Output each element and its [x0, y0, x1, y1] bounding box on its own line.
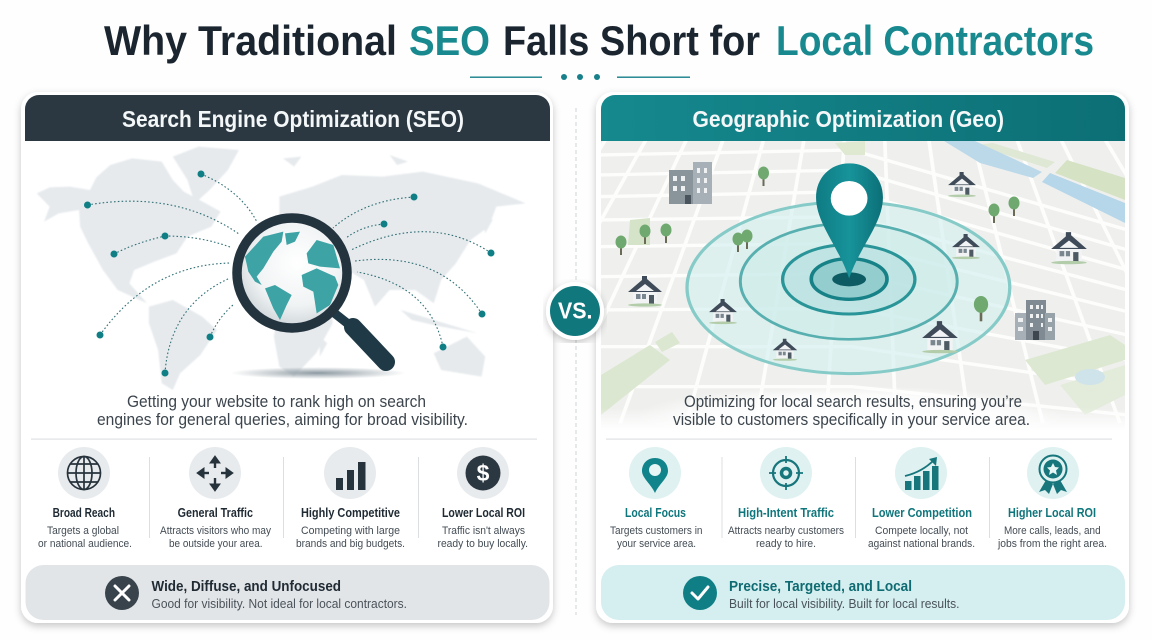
title: Why Traditional — [104, 17, 397, 64]
feature: Highly Competitive: brands and big budgets. — [296, 538, 405, 550]
feature: Local Focus: Local Focus — [625, 506, 686, 520]
trees — [616, 166, 1020, 321]
feature: High-Intent Traffic: High-Intent Traffic — [738, 506, 834, 520]
panel: Geo — [592, 91, 1133, 630]
Geo verdict band — [601, 565, 1125, 620]
title — [104, 17, 1094, 64]
city map illustration — [601, 141, 1125, 420]
SEO header: Search Engine Optimization (SEO) — [122, 106, 464, 132]
title: SEO — [409, 17, 490, 64]
feature: High-Intent Traffic — [728, 447, 844, 550]
icon: check — [683, 576, 717, 610]
feature: Lower Local ROI: Traffic isn't always — [442, 525, 525, 537]
feature: General Traffic: Attracts visitors who may — [160, 525, 271, 537]
feature: Broad Reach: Broad Reach — [53, 506, 115, 520]
title: Falls Short for — [503, 17, 760, 64]
connection lines — [88, 174, 491, 373]
icon: target — [769, 456, 803, 490]
feature: General Traffic: General Traffic — [178, 506, 253, 520]
icon: cross — [105, 576, 139, 610]
feature: Local Focus — [610, 447, 702, 550]
feature: Higher Local ROI — [997, 447, 1107, 550]
map patches — [601, 141, 1125, 415]
panel: SEO — [21, 92, 553, 623]
feature: Lower Local ROI — [438, 447, 528, 550]
icon: magnifying glass with globe — [237, 218, 386, 362]
feature: General Traffic: be outside your area. — [169, 538, 262, 550]
world map illustration — [37, 147, 526, 390]
Geo description: Optimizing for local search results, ensuring you’re — [684, 392, 1022, 411]
lens shadow — [236, 368, 400, 378]
feature: Lower Competition: Lower Competition — [872, 506, 972, 520]
Geo description: visible to customers specifically in your service area. — [673, 410, 1030, 429]
Geo description — [673, 392, 1030, 429]
title: Local Contractors — [776, 17, 1094, 64]
title ornament — [470, 74, 690, 80]
feature: Lower Local ROI: Lower Local ROI — [442, 506, 525, 520]
radius rings — [687, 202, 1010, 374]
Geo verdict band: Built for local visibility. Built for local results. — [729, 597, 960, 611]
icon: four arrows — [197, 456, 233, 491]
feature: Broad Reach — [38, 447, 132, 550]
feature: General Traffic — [160, 447, 271, 550]
icon: dollar: $ — [477, 460, 490, 486]
SEO verdict band: Good for visibility. Not ideal for local contractors. — [152, 597, 407, 611]
VS badge — [546, 282, 604, 340]
icon: map pin — [816, 163, 883, 278]
feature: Local Focus: Targets customers in — [610, 525, 702, 537]
SEO description: Getting your website to rank high on search — [127, 392, 426, 411]
SEO header — [25, 95, 550, 141]
centre dashed divider — [575, 108, 577, 615]
Geo verdict band: Precise, Targeted, and Local — [729, 578, 912, 595]
feature: Highly Competitive — [296, 447, 405, 550]
feature: Lower Local ROI: ready to buy locally. — [438, 538, 528, 550]
icon: growth chart — [905, 457, 938, 490]
world map continents — [37, 147, 526, 390]
feature: Lower Competition: against national brands. — [868, 538, 975, 550]
SEO description: engines for general queries, aiming for broad visibility. — [97, 410, 468, 429]
feature: High-Intent Traffic: Attracts nearby customers — [728, 525, 844, 537]
houses — [628, 172, 1087, 361]
Geo header — [601, 95, 1125, 141]
SEO verdict band — [26, 565, 550, 620]
icon: award ribbon — [1039, 456, 1067, 494]
buildings — [669, 162, 1055, 340]
feature: Highly Competitive: Highly Competitive — [301, 506, 400, 520]
VS badge: VS. — [558, 298, 592, 324]
road network — [601, 141, 1125, 418]
icon: pin — [642, 458, 668, 493]
feature: Broad Reach: Targets a global — [47, 525, 119, 537]
feature: Higher Local ROI: Higher Local ROI — [1008, 506, 1096, 520]
feature: High-Intent Traffic: ready to hire. — [756, 538, 816, 550]
feature: Highly Competitive: Competing with large — [301, 525, 400, 537]
feature: Broad Reach: or national audience. — [38, 538, 132, 550]
SEO description — [90, 390, 475, 432]
feature: Local Focus: your service area. — [617, 538, 696, 550]
feature: Higher Local ROI: More calls, leads, and — [1004, 525, 1101, 537]
icon: globe — [68, 456, 100, 490]
location dots — [84, 170, 494, 376]
feature: Lower Competition — [868, 447, 975, 550]
Geo header: Geographic Optimization (Geo) — [692, 106, 1004, 132]
SEO verdict band: Wide, Diffuse, and Unfocused — [152, 578, 341, 595]
icon: bars — [336, 462, 366, 490]
feature: Higher Local ROI: jobs from the right area. — [997, 538, 1107, 550]
feature: Lower Competition: Compete locally, not — [875, 525, 968, 537]
